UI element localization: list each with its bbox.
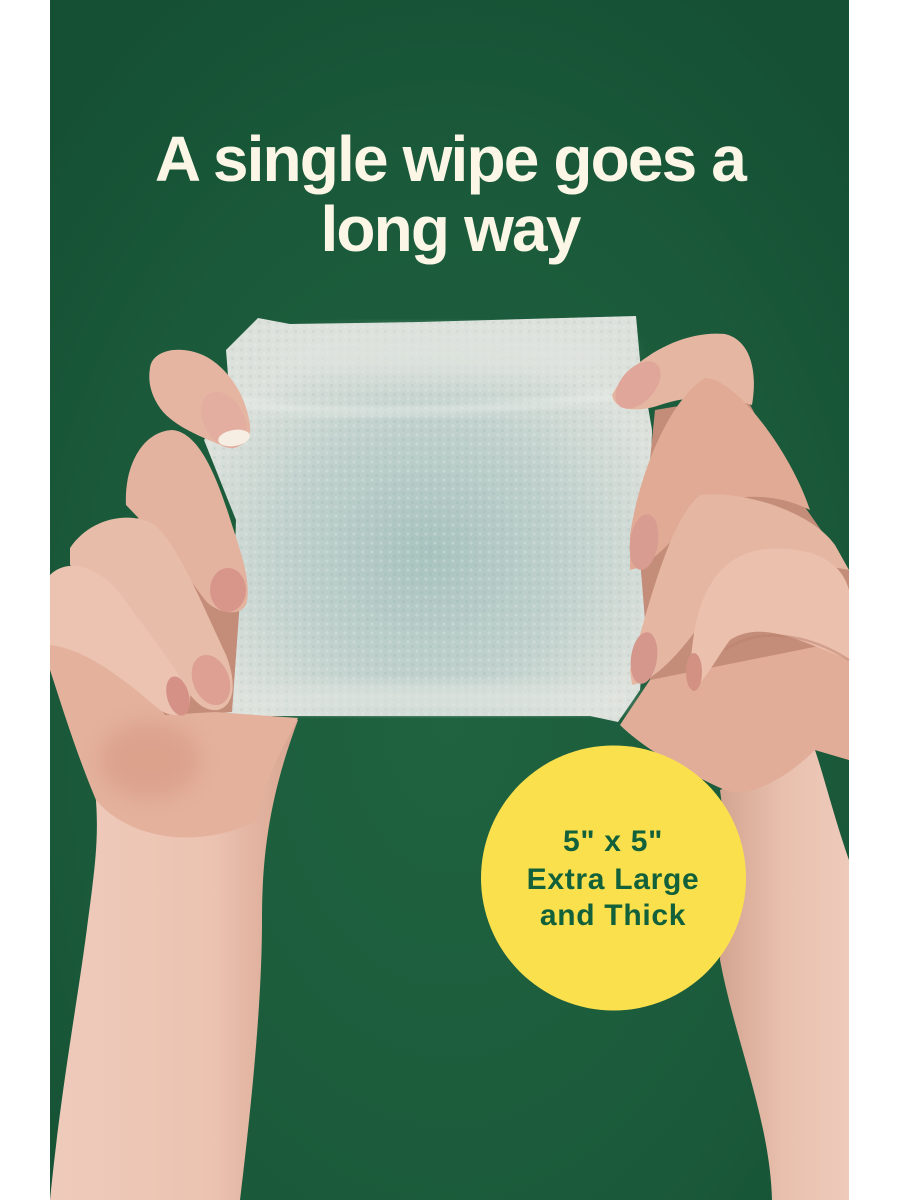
- hand shadow base: [622, 395, 849, 780]
- finger: third: [630, 494, 849, 685]
- callout: size badge: 5" x 5": [563, 825, 663, 858]
- nails right: [607, 353, 702, 691]
- title: A single wipe goes a: [155, 123, 747, 195]
- left hand: [50, 350, 298, 837]
- callout: size badge: Extra Large: [527, 863, 699, 896]
- right hand: [607, 334, 849, 792]
- hand shadow base: [60, 480, 240, 718]
- finger: ring: [70, 518, 233, 710]
- finger: little: [50, 566, 190, 715]
- title: [155, 123, 747, 265]
- left arm: [50, 700, 298, 1200]
- finger: second: [630, 378, 810, 570]
- right arm: [720, 750, 849, 1200]
- palm: [50, 640, 298, 837]
- callout: size badge: [481, 746, 746, 1010]
- palm: [620, 640, 849, 792]
- finger: middle: [126, 430, 248, 612]
- finger: top: [612, 334, 754, 409]
- finger: fourth: [690, 549, 849, 690]
- callout: size badge: and Thick: [540, 899, 686, 932]
- finger: index top: [149, 350, 250, 447]
- wipe: [204, 316, 652, 722]
- nails left: [162, 384, 256, 718]
- title: long way: [320, 193, 582, 265]
